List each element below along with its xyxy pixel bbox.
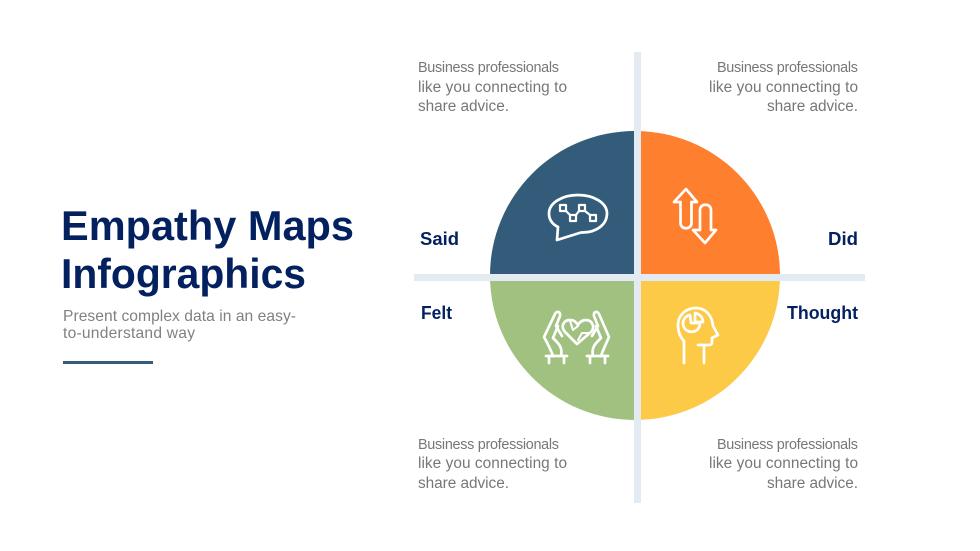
icon: hands holding heart bbox=[544, 312, 609, 363]
text block: said: Business professionals bbox=[418, 60, 559, 76]
quadrant: thought bbox=[635, 276, 780, 420]
label: thought: Thought bbox=[787, 302, 858, 323]
text block: thought: like you connecting to bbox=[709, 455, 858, 472]
icon: up and down arrows bbox=[674, 189, 716, 243]
text block: said bbox=[418, 60, 567, 115]
text block: did bbox=[709, 60, 858, 115]
title: Empathy Maps bbox=[61, 202, 354, 249]
text block: thought: Business professionals bbox=[717, 437, 858, 453]
subtitle: Present complex data in an easy- bbox=[63, 308, 296, 325]
text block: said: share advice. bbox=[418, 98, 509, 115]
vertical divider bbox=[634, 52, 641, 503]
quadrant: did bbox=[635, 131, 780, 276]
text block: did: Business professionals bbox=[717, 60, 858, 76]
quadrant: felt bbox=[490, 276, 635, 420]
subtitle bbox=[63, 308, 296, 342]
text block: did: like you connecting to bbox=[709, 79, 858, 96]
horizontal divider bbox=[414, 274, 865, 281]
text block: thought: share advice. bbox=[767, 475, 858, 492]
title: Infographics bbox=[61, 250, 306, 297]
text block: felt bbox=[418, 437, 567, 492]
title underline bbox=[63, 361, 153, 364]
text block: thought bbox=[709, 437, 858, 492]
quadrant: said bbox=[490, 131, 635, 276]
icon: head with pie chart bbox=[678, 308, 718, 363]
text block: felt: like you connecting to bbox=[418, 455, 567, 472]
title bbox=[61, 202, 354, 297]
subtitle: to-understand way bbox=[63, 325, 195, 342]
text block: felt: Business professionals bbox=[418, 437, 559, 453]
label: did: Did bbox=[828, 228, 858, 249]
icon: speech bubble bbox=[549, 195, 607, 240]
text block: felt: share advice. bbox=[418, 475, 509, 492]
text block: did: share advice. bbox=[767, 98, 858, 115]
label: said: Said bbox=[420, 228, 459, 249]
label: felt: Felt bbox=[421, 302, 452, 323]
text block: said: like you connecting to bbox=[418, 79, 567, 96]
